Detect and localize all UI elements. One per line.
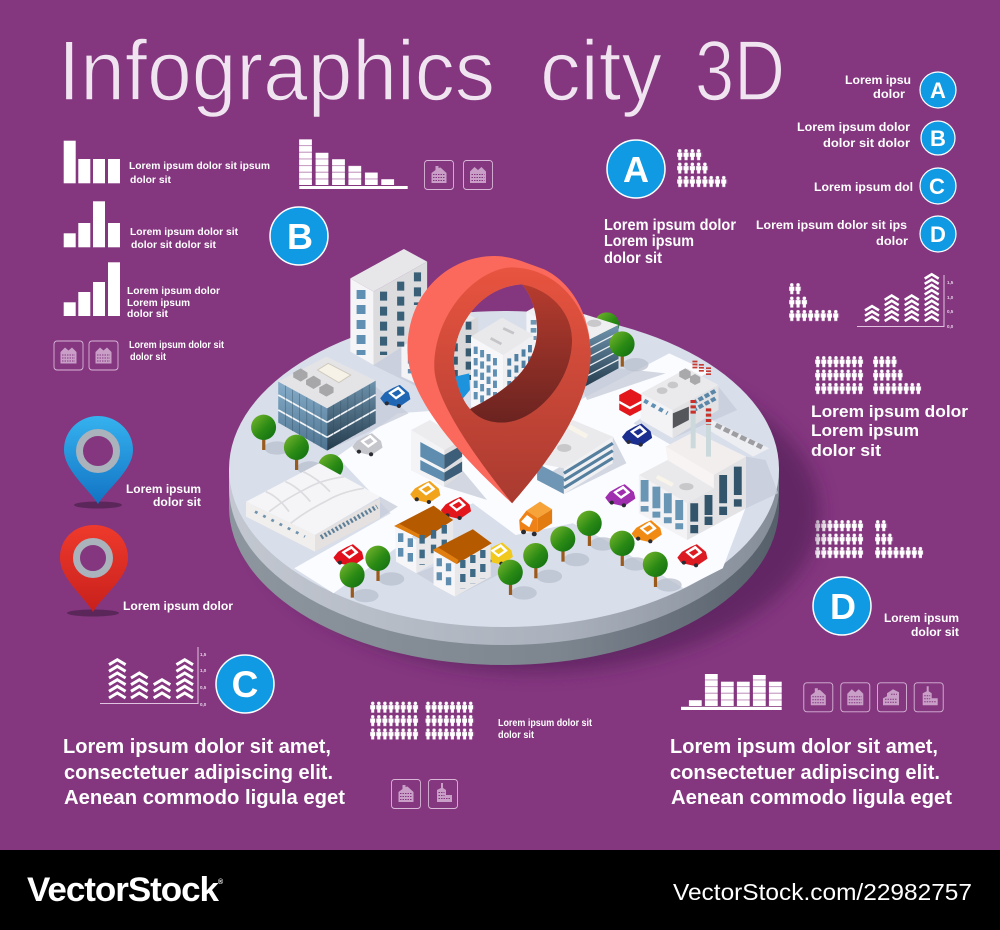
- icon: red map pin: [60, 525, 128, 616]
- panel: bar chart 1 with caption: dolor sit: [130, 174, 171, 186]
- text block right: dolor sit: [811, 441, 881, 460]
- house 1: [394, 506, 453, 573]
- chevron chart right: 0,0: [947, 324, 954, 329]
- text block D: [884, 613, 959, 639]
- title: 3D: [695, 24, 785, 119]
- vehicle: yellow car: [411, 482, 440, 504]
- roads: [294, 353, 746, 593]
- building: rear left tower: [401, 293, 478, 397]
- trees left: [251, 415, 357, 494]
- vehicle: navy car: [623, 424, 651, 447]
- chevron chart C: 0,5: [200, 685, 207, 690]
- panel: left house icons with caption: [54, 340, 225, 370]
- legend: A to D: Lorem ipsum dolor: [797, 122, 911, 134]
- badge: big D: D: [830, 586, 856, 627]
- caption: blue pin: dolor sit: [153, 497, 201, 509]
- legend: A to D: C: [929, 174, 945, 199]
- text block right: Lorem ipsum dolor: [811, 402, 968, 421]
- disc shadow: [250, 352, 820, 672]
- chevron chart C: 1,5: [200, 652, 207, 657]
- stacked bar chart top: [299, 139, 408, 189]
- footer bar: ®: [218, 878, 224, 886]
- text block C: consectetuer adipiscing elit.: [64, 762, 333, 784]
- chevron chart C: 1,0: [200, 668, 207, 673]
- trees bottom row: [340, 511, 682, 602]
- text block right: [811, 402, 968, 460]
- text block bottom right: Aenean commodo ligula eget: [671, 787, 952, 809]
- chevron chart right: [857, 274, 954, 329]
- panel: bar chart 2 with caption: Lorem ipsum dolor sit: [130, 226, 238, 238]
- panel: bar chart 3 with caption: dolor sit: [127, 308, 168, 320]
- building: left glass office: [278, 357, 376, 451]
- panel: bar chart 3 with caption: Lorem ipsum: [127, 297, 190, 309]
- building: upper right factory: [641, 361, 719, 438]
- footer bar: VectorStock: [27, 871, 219, 909]
- legend: A to D: dolor: [876, 236, 909, 248]
- badge: big B: [270, 207, 328, 265]
- text block bottom right: consectetuer adipiscing elit.: [670, 762, 940, 784]
- text block A: dolor sit: [604, 250, 662, 267]
- map pin: [407, 256, 591, 503]
- building: large factory: [639, 400, 769, 540]
- legend: A to D: B: [930, 126, 946, 151]
- pictogram: people A: [677, 149, 727, 188]
- vehicle: orange truck: [519, 502, 552, 536]
- chevron chart C: 0,0: [200, 702, 207, 707]
- text block bottom right: Lorem ipsum dolor sit amet,: [670, 736, 938, 758]
- vehicle: purple car: [606, 485, 635, 507]
- tree right rear: [610, 331, 649, 371]
- panel: bar chart 1 with caption: Lorem ipsum dolor sit ipsum: [129, 160, 270, 172]
- legend: A to D: dolor sit dolor: [823, 138, 911, 150]
- stacked bar chart bottom right: [681, 674, 782, 710]
- bottom centre house icons: [392, 780, 458, 808]
- vehicle: grey car: [353, 434, 382, 456]
- text block right: Lorem ipsum: [811, 421, 919, 440]
- legend: A to D: [756, 72, 956, 252]
- chevron chart right: 1,0: [947, 295, 954, 300]
- panel: bar chart 1 with caption: [64, 141, 270, 186]
- legend: A to D: dolor: [873, 89, 906, 101]
- vehicle: yellow car behind house: [484, 543, 512, 566]
- pictogram: people middle right: [815, 356, 864, 395]
- top centre house icons: [424, 160, 492, 190]
- text block C: Aenean commodo ligula eget: [64, 787, 345, 809]
- caption: bottom centre: [498, 718, 593, 741]
- panel: bar chart 3 with caption: Lorem ipsum dolor: [127, 285, 220, 297]
- caption: blue pin: Lorem ipsum: [126, 484, 201, 496]
- caption: bottom centre: Lorem ipsum dolor sit: [498, 718, 593, 729]
- vehicle: orange car: [632, 521, 661, 543]
- pictogram: people bottom centre: [370, 702, 419, 740]
- text block C: Lorem ipsum dolor sit amet,: [63, 736, 331, 758]
- caption: red pin: Lorem ipsum dolor: [123, 601, 234, 613]
- chevron chart right: 1,5: [947, 280, 954, 285]
- text block C: [63, 736, 345, 809]
- vehicle: red white car: [442, 498, 470, 520]
- legend: A to D: A: [930, 78, 946, 103]
- legend: A to D: Lorem ipsum dol: [814, 182, 913, 194]
- pictogram: people bottom centre 2: [425, 702, 474, 740]
- badge: big C: [216, 655, 274, 713]
- text block A: [604, 217, 736, 267]
- caption: bottom centre: dolor sit: [498, 730, 535, 741]
- pictogram: people lower right 2: [875, 520, 924, 559]
- building: centre left block: [411, 420, 462, 487]
- panel: bar chart 2 with caption: [64, 201, 238, 251]
- panel: left house icons with caption: dolor sit: [130, 352, 167, 363]
- building: greenhouse warehouse: [246, 463, 380, 552]
- building: centre tower: [471, 318, 534, 413]
- legend: A to D: D: [930, 222, 946, 247]
- text block D: dolor sit: [911, 627, 959, 639]
- panel: bar chart 3 with caption: [64, 262, 220, 320]
- shadows on ground: [278, 340, 778, 597]
- caption: blue pin: [126, 484, 201, 509]
- tree behind buildings: [594, 312, 633, 352]
- house 2: [432, 529, 492, 597]
- title: Infographics: [58, 24, 495, 119]
- legend: A to D: Lorem ipsum dolor sit ips: [756, 220, 907, 232]
- chevron chart right: 0,5: [947, 309, 954, 314]
- title: [58, 24, 785, 119]
- badge: big A: [607, 140, 665, 198]
- building: centre right block: [537, 420, 613, 494]
- panel: left house icons with caption: Lorem ipsum dolor sit: [129, 340, 225, 351]
- badge: big A: A: [623, 149, 649, 190]
- vehicle: red truck: [619, 389, 641, 416]
- pictogram: people lower right: [815, 520, 864, 559]
- vehicle: red car left: [334, 545, 363, 567]
- icon: blue map pin: [64, 416, 133, 508]
- panel: bar chart 2 with caption: dolor sit dolor sit: [131, 239, 216, 251]
- chevron chart C: [100, 647, 207, 707]
- text block D: Lorem ipsum: [884, 613, 959, 625]
- pictogram: people middle right 2: [873, 356, 922, 395]
- footer bar: VectorStock.com/22982757: [673, 879, 972, 905]
- title: city: [540, 24, 662, 119]
- city illustration: [246, 249, 778, 602]
- badge: big D: [813, 577, 871, 635]
- bottom right house icons: [804, 683, 943, 712]
- vehicle: red car right: [678, 545, 707, 567]
- building: rear right glass block: [526, 302, 619, 397]
- vehicle: blue truck behind pin: [455, 373, 470, 399]
- footer bar: [0, 850, 1000, 930]
- text block bottom right: [670, 736, 952, 809]
- text block A: Lorem ipsum: [604, 233, 694, 250]
- legend: A to D: Lorem ipsu: [845, 75, 911, 87]
- platform disc: [229, 311, 779, 665]
- badge: big B: B: [287, 216, 313, 257]
- vehicle: blue car: [381, 386, 410, 408]
- pictogram: people top right: [789, 283, 839, 322]
- building: tall tower: [350, 249, 427, 365]
- text block A: Lorem ipsum dolor: [604, 217, 736, 234]
- badge: big C: C: [232, 664, 258, 705]
